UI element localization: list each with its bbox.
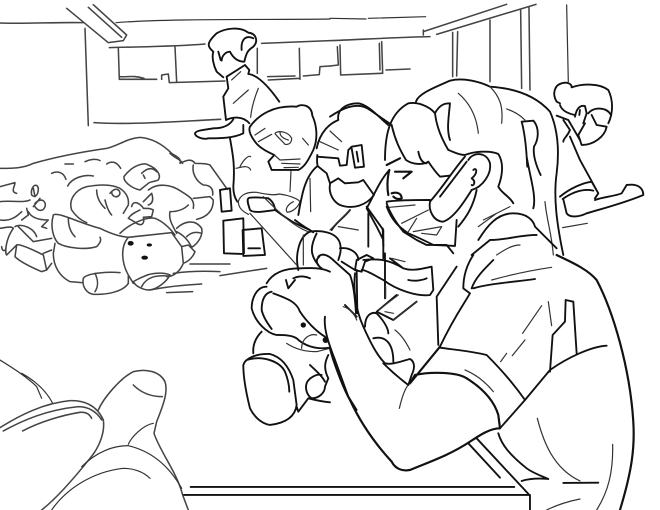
ponytail: [522, 121, 541, 208]
back: [557, 255, 634, 510]
small bear: [124, 164, 159, 190]
creases in pile: [52, 159, 121, 186]
table top: [183, 487, 530, 495]
back worker on the right: [554, 83, 643, 228]
third worker forearm: [362, 258, 433, 295]
floor lines under pile: [150, 264, 267, 293]
third worker with mask: [295, 103, 388, 232]
teddy bear pile: [0, 137, 227, 294]
bear eyes: [128, 241, 152, 260]
boxes on the floor: [220, 188, 265, 256]
factory background: walls, ceiling and columns, right: [330, 4, 568, 90]
pile outline: [0, 137, 227, 195]
hand holding bear: [248, 197, 310, 230]
main worker head and hair: [330, 79, 563, 255]
main worker body and arm: [330, 255, 634, 510]
teddy bear being repaired: [243, 268, 330, 425]
standing worker: [195, 29, 279, 202]
bear under hand: [354, 273, 414, 385]
wrist band: [355, 255, 373, 272]
face mask: [318, 167, 374, 207]
torso folds: [498, 433, 598, 483]
torso: [230, 138, 237, 202]
raised hand: [330, 106, 389, 247]
hands, wrist and third worker sleeve: [250, 197, 453, 410]
large front bear: [52, 214, 195, 294]
back worker mask: [578, 109, 611, 145]
ear: [468, 154, 490, 190]
shoulder: [295, 167, 350, 232]
forearm: [330, 347, 500, 470]
bear with bow: [71, 185, 128, 223]
neck and collar: [458, 190, 557, 255]
mask straps and mask: [387, 157, 472, 246]
factory background: walls, ceiling beam and windows, left: [0, 5, 330, 126]
bears on the left: [0, 183, 52, 272]
pointing arm: [195, 119, 243, 139]
eye and brow: [387, 158, 412, 199]
second worker with mask: [238, 105, 316, 230]
table edge near arm: [468, 438, 530, 510]
foreground knee and legs: [0, 360, 188, 510]
shirt: [223, 65, 279, 123]
sleeve: [440, 300, 607, 428]
bear foot: [243, 332, 330, 425]
hair: [416, 79, 563, 255]
back worker shirt and arm: [557, 116, 643, 216]
hair and face: [209, 29, 256, 77]
